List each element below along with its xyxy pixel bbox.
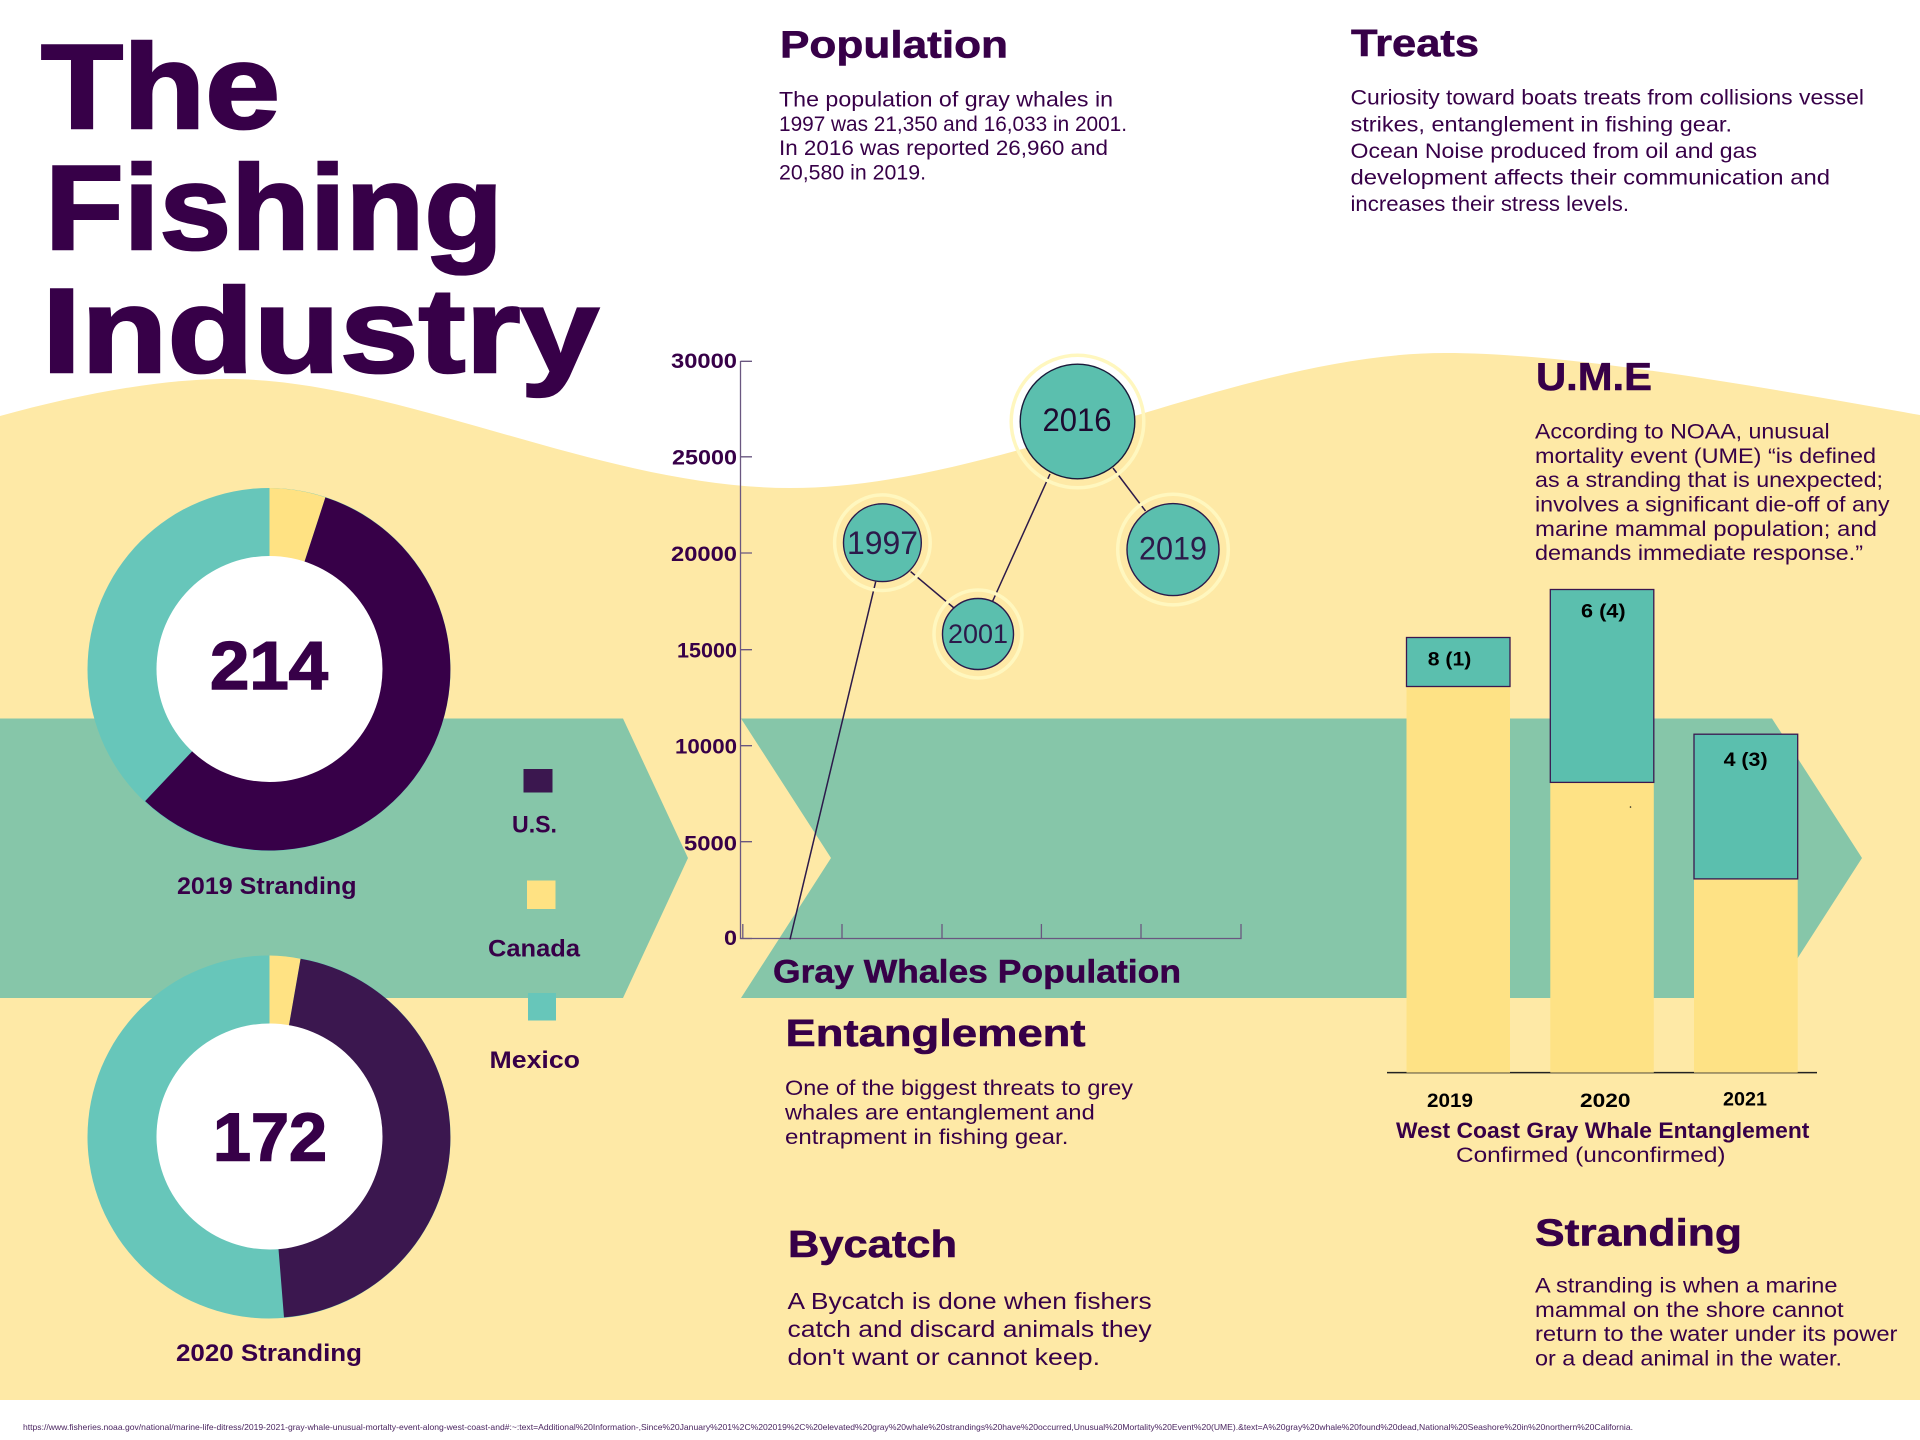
y axis labels: 15000 xyxy=(677,640,737,662)
data point 1997: 1997 xyxy=(847,525,918,561)
U.M.E body text: involves a significant die-off of any xyxy=(1535,494,1890,516)
chart caption: Confirmed (unconfirmed) xyxy=(1456,1144,1726,1167)
treats body text: development affects their communication and xyxy=(1350,167,1830,190)
entanglement body text: entrapment in fishing gear. xyxy=(785,1126,1068,1149)
panel: U.M.E text xyxy=(1535,356,1890,565)
heading: bycatch: Bycatch xyxy=(788,1224,957,1266)
x axis year labels xyxy=(1427,1090,1767,1112)
x axis year labels: 2021 xyxy=(1723,1090,1767,1111)
bar 2020 xyxy=(1550,590,1654,1073)
legend item: Mexico: Mexico xyxy=(490,1047,580,1074)
title xyxy=(41,20,599,398)
data point 2019: 2019 xyxy=(1139,530,1207,566)
bycatch body text: catch and discard animals they xyxy=(788,1316,1152,1342)
data point 2001 xyxy=(934,590,1022,678)
treats body text xyxy=(1350,87,1864,216)
U.M.E body text: demands immediate response.” xyxy=(1535,542,1863,565)
left arrow band xyxy=(0,718,688,998)
title: Fishing xyxy=(45,141,503,275)
chart: gray whales population xyxy=(671,350,1241,990)
connecting lines xyxy=(790,468,1146,940)
bar 2019 xyxy=(1406,638,1510,1073)
chart title: Gray Whales Population xyxy=(773,954,1181,990)
chart caption: West Coast Gray Whale Entanglement xyxy=(1396,1118,1810,1143)
legend item: Canada xyxy=(488,880,581,962)
population body text: 20,580 in 2019. xyxy=(779,162,926,184)
x axis year labels: 2019 xyxy=(1427,1091,1473,1112)
y axis labels: 0 xyxy=(724,927,737,950)
y axis labels: 30000 xyxy=(671,350,737,373)
baseline xyxy=(1387,1072,1817,1074)
stranding body text: A stranding is when a marine xyxy=(1535,1274,1838,1298)
donut chart 2019 xyxy=(88,488,450,851)
entanglement body text xyxy=(784,1077,1134,1149)
data point 2016: 2016 xyxy=(1042,402,1112,438)
heading: entanglement: Entanglement xyxy=(786,1013,1086,1055)
panel: 2019 stranding donut xyxy=(88,488,450,900)
U.M.E body text: marine mammal population; and xyxy=(1535,518,1877,541)
panel: population text xyxy=(779,24,1127,184)
U.M.E body text: mortality event (UME) “is defined xyxy=(1535,445,1876,468)
legend item: U.S.: U.S. xyxy=(512,812,557,838)
legend item: Canada: Canada xyxy=(488,936,581,962)
panel: stranding text xyxy=(1535,1213,1898,1370)
source citation: https://www.fisheries.noaa.gov/national/marine-life-ditress/2019-2021-gray-whale-unusual-mortalty-event-along-west-coast-and#:~:text=Additional%20Information-,Since%20January%201%2C%202019%2C%20elevated%20gray%20whale%20strandings%20have%20occurred,Unusual%20Mortality%20Event%20(UME).&text=A%20gray%20whale%20found%20dead,National%20Seashore%20in%20northern%20California. xyxy=(23,1422,1633,1432)
heading: treats: Treats xyxy=(1351,23,1479,65)
chart caption xyxy=(1396,1118,1810,1167)
label: 2020 stranding: 2020 Stranding xyxy=(176,1340,362,1367)
bar 2021: 4 (3) xyxy=(1724,750,1768,771)
heading: stranding: Stranding xyxy=(1535,1213,1742,1255)
bycatch body text: A Bycatch is done when fishers xyxy=(788,1288,1152,1314)
panel: treats text xyxy=(1350,23,1864,216)
title: The xyxy=(41,20,280,154)
y axis labels: 10000 xyxy=(675,736,737,758)
title: Industry xyxy=(42,264,599,398)
panel: bycatch text xyxy=(788,1224,1152,1370)
stranding body text xyxy=(1535,1274,1898,1370)
entanglement body text: One of the biggest threats to grey xyxy=(785,1077,1134,1100)
chart: west coast entanglement stacked bars xyxy=(1387,590,1817,1167)
panel: 2020 stranding donut xyxy=(88,956,450,1367)
heading: population: Population xyxy=(780,24,1008,66)
data point 2016 xyxy=(1011,355,1144,488)
population body text: 1997 was 21,350 and 16,033 in 2001. xyxy=(779,113,1127,136)
heading: U.M.E: U.M.E xyxy=(1536,356,1652,399)
bar 2021 xyxy=(1694,734,1798,1073)
legend xyxy=(488,769,581,1074)
legend item: Mexico xyxy=(490,993,580,1074)
stranding body text: mammal on the shore cannot xyxy=(1535,1299,1844,1322)
treats body text: Curiosity toward boats treats from collisions vessel xyxy=(1350,87,1864,110)
donut chart 2020 xyxy=(88,956,450,1318)
treats body text: strikes, entanglement in fishing gear. xyxy=(1350,113,1732,136)
data point 1997 xyxy=(835,495,930,590)
data point 2019 xyxy=(1118,494,1228,605)
U.M.E body text: as a stranding that is unexpected; xyxy=(1535,469,1883,492)
bar 2019: 8 (1) xyxy=(1428,650,1471,671)
panel: entanglement text xyxy=(784,1013,1134,1149)
data point 2001: 2001 xyxy=(948,619,1008,649)
entanglement body text: whales are entanglement and xyxy=(784,1102,1095,1124)
treats body text: increases their stress levels. xyxy=(1350,193,1629,216)
donut total 172: 172 xyxy=(213,1100,327,1176)
background wave xyxy=(0,353,1920,1400)
y axis labels xyxy=(671,350,737,950)
donut total 214: 214 xyxy=(210,628,328,704)
stranding body text: return to the water under its power xyxy=(1535,1323,1898,1346)
y axis labels: 25000 xyxy=(672,447,737,470)
x axis year labels: 2020 xyxy=(1580,1091,1630,1112)
treats body text: Ocean Noise produced from oil and gas xyxy=(1350,140,1757,163)
legend item: U.S. xyxy=(512,769,557,838)
label: 2019 stranding: 2019 Stranding xyxy=(177,873,356,900)
bycatch body text xyxy=(788,1288,1152,1370)
stranding body text: or a dead animal in the water. xyxy=(1535,1348,1842,1370)
population body text: In 2016 was reported 26,960 and xyxy=(779,137,1108,160)
bycatch body text: don't want or cannot keep. xyxy=(788,1344,1100,1370)
y axis labels: 5000 xyxy=(684,832,737,855)
U.M.E body text: According to NOAA, unusual xyxy=(1535,420,1830,444)
y axis labels: 20000 xyxy=(671,543,737,566)
U.M.E body text xyxy=(1535,420,1890,565)
chart axes xyxy=(740,361,1241,938)
right arrow band xyxy=(741,718,1862,998)
bar 2020: 6 (4) xyxy=(1581,602,1626,622)
population body text xyxy=(779,88,1127,184)
population body text: The population of gray whales in xyxy=(779,88,1113,112)
